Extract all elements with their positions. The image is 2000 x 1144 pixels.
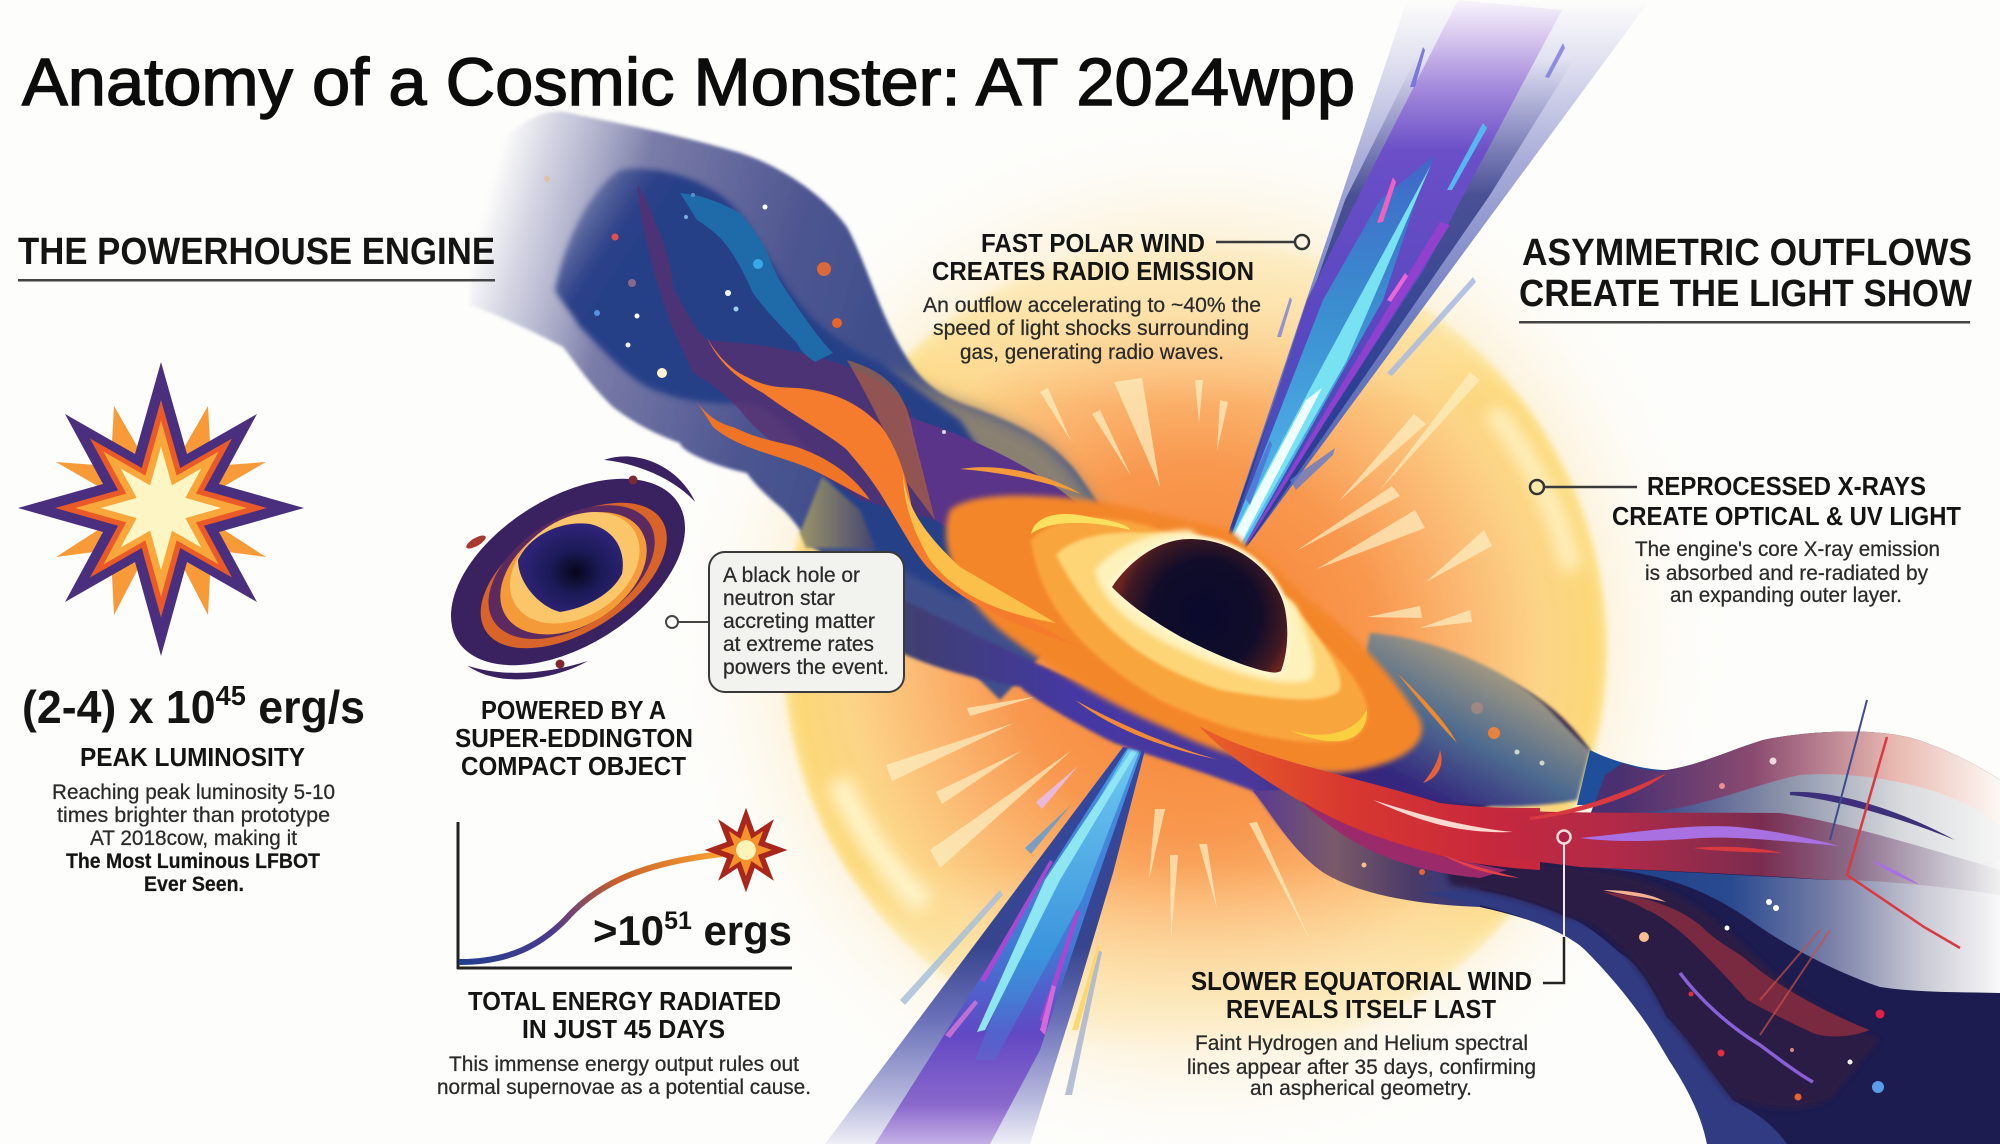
callout: reprocessed x-rays: is absorbed and re-radiated by [1645,562,1928,585]
callout: slower equatorial wind: lines appear after 35 days, confirming [1187,1056,1536,1079]
glowing photosphere disc [715,160,1675,1120]
black hole shadow [1112,539,1287,673]
upper wind ribbon [470,112,1130,700]
heading: asymmetric outflows: CREATE THE LIGHT SHOW [1519,273,1972,315]
callout: fast polar wind: gas, generating radio waves. [960,341,1224,364]
callout: accretion explanation: powers the event. [723,656,889,679]
label: total energy radiated: TOTAL ENERGY RADIATED [468,986,781,1016]
callout: reprocessed x-rays: The engine's core X-ray emission [1635,538,1940,561]
chart: energy growth curve: >10 [593,907,664,954]
upper jet [1228,0,1650,548]
stars in the ribbon [544,176,1884,1100]
chart: energy growth curve: ergs [692,907,792,954]
icon: compact object with accretion disc [413,430,737,716]
label: super-eddington compact object: POWERED BY A [481,695,666,725]
callout: reprocessed x-rays: an expanding outer layer. [1670,584,1902,607]
chart: energy growth curve: 51 [664,907,692,935]
heading: asymmetric outflows: ASYMMETRIC OUTFLOWS [1522,232,1972,274]
label: total energy radiated [468,986,781,1044]
text: energy description: This immense energy output rules out [449,1053,799,1076]
callout: fast polar wind: An outflow accelerating to ~40% the [923,294,1261,317]
callout: accretion explanation: A black hole or [723,564,860,587]
callout: fast polar wind: FAST POLAR WIND [981,228,1205,258]
text: energy description [437,1053,811,1099]
callout: fast polar wind: speed of light shocks surrounding [933,317,1249,340]
heading: asymmetric outflows [1519,232,1972,324]
callout: slower equatorial wind [1187,830,1570,1100]
orange accretion flames and disc [697,338,1457,783]
label: total energy radiated: IN JUST 45 DAYS [522,1014,725,1044]
callout: reprocessed x-rays: REPROCESSED X-RAYS [1647,471,1926,501]
callout: slower equatorial wind: SLOWER EQUATORIAL WIND [1191,966,1532,996]
text: peak luminosity description: AT 2018cow, making it [90,827,297,850]
text: peak luminosity description: The Most Luminous LFBOT [66,850,320,873]
callout: reprocessed x-rays: CREATE OPTICAL & UV LIGHT [1612,501,1961,531]
callout: fast polar wind [923,228,1309,364]
text: energy description: normal supernovae as a potential cause. [437,1076,811,1099]
stat: peak luminosity value: erg/s [246,681,365,733]
title: Anatomy of a Cosmic Monster: AT 2024wpp [22,45,1355,120]
label: super-eddington compact object: SUPER-EDDINGTON [455,723,693,753]
lower jet [825,747,1145,1144]
icon: peak luminosity burst [18,362,304,656]
label: super-eddington compact object [455,695,693,781]
callout: accretion explanation: neutron star [723,587,835,610]
stat: peak luminosity value: 45 [216,680,246,711]
callout: accretion explanation: at extreme rates [723,633,874,656]
callout: accretion explanation: accreting matter [723,610,875,633]
callout: reprocessed x-rays [1530,471,1961,607]
callout: fast polar wind: CREATES RADIO EMISSION [932,256,1254,286]
callout: slower equatorial wind: REVEALS ITSELF LAST [1226,994,1496,1024]
stat: peak luminosity value: (2-4) x 10 [22,681,221,733]
callout: slower equatorial wind: an aspherical geometry. [1250,1077,1472,1100]
chart: energy growth curve [457,808,792,969]
text: peak luminosity description: Ever Seen. [144,873,244,896]
label: super-eddington compact object: COMPACT OBJECT [461,751,686,781]
callout: accretion explanation [666,552,904,692]
red equatorial outflow [1199,700,2000,1082]
text: peak luminosity description [52,781,335,896]
text: peak luminosity description: times brighter than prototype [57,804,330,827]
heading: the powerhouse engine: THE POWERHOUSE ENGINE [18,231,495,273]
callout: slower equatorial wind: Faint Hydrogen and Helium spectral [1195,1032,1528,1055]
text: peak luminosity description: Reaching peak luminosity 5-10 [52,781,335,804]
label: peak luminosity: PEAK LUMINOSITY [80,742,305,772]
equatorial ribbon body [880,590,2000,1144]
